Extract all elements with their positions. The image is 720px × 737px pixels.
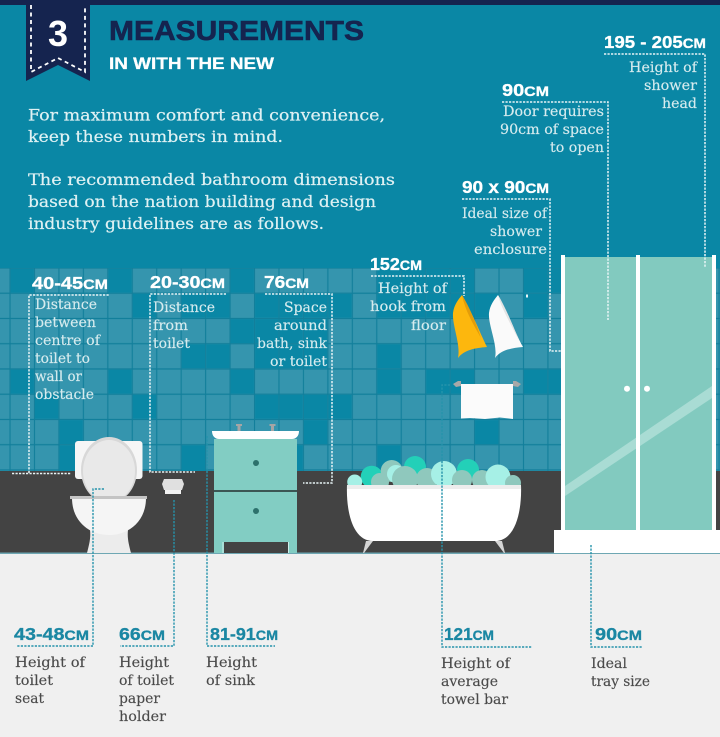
callout: 66cm: holder [119,709,166,725]
callout: 90cm tray: tray size [591,674,650,690]
intro text: based on the nation building and design [28,192,376,211]
callout: 90cm door: to open [550,140,604,156]
callout: 121cm [441,385,532,708]
callout: 40-45cm [12,273,109,474]
callout: 43-48cm: 43-48 CM [14,624,89,644]
callout: 195-205cm: Height of [629,60,698,76]
towel speck [526,294,528,298]
callout: 66cm [119,500,174,725]
intro text: For maximum comfort and convenience, [28,106,385,124]
callout: 121cm: towel bar [441,692,508,708]
intro text: industry guidelines are as follows. [28,214,324,233]
callout: 90 x 90cm [462,177,562,351]
callout: 43-48cm [14,489,104,707]
callout: 76cm [257,272,332,483]
callout: 66cm: of toilet [119,673,174,689]
bath bubbles [347,456,521,485]
intro text [28,106,395,233]
intro text: The recommended bathroom dimensions [28,170,395,189]
ribbon badge: 3 [48,13,68,54]
callout: 195-205cm [604,32,706,267]
callout: 81-91cm: 81-91CM [210,624,278,644]
callout: 40-45cm: centre of [35,333,101,349]
top bar [0,0,720,5]
callout: 152cm: Height of [378,281,448,297]
callout: 76cm: 76CM [264,272,309,292]
callout: 121cm: 121CM [444,624,494,644]
callout: 121cm: Height of [441,656,512,672]
callout: 90cm door: 90cm of space [500,122,604,138]
callout: 81-91cm: Height [206,655,257,671]
callout: 195-205cm: head [662,96,697,112]
callout: 90cm door: Door requires [503,104,604,120]
callout: 195-205cm: shower [644,78,698,94]
callout: 90 x 90cm: enclosure [474,242,547,258]
callout: 152cm: floor [411,318,447,334]
callout: 20-30cm: 20-30 CM [150,272,225,292]
callout: 66cm: 66CM [119,624,165,644]
callout: 90cm tray [591,545,650,690]
callout: 90 x 90cm: Ideal size of [462,206,548,222]
callout: 90cm tray: 90CM [595,624,642,644]
toilet paper holder [162,479,184,494]
callout: 40-45cm: 40-45 CM [32,273,108,293]
sink cabinet [212,424,299,553]
towel bar [453,381,521,419]
callout: 40-45cm: toilet to [35,351,90,367]
bathtub [347,485,521,553]
callout: 76cm: bath, sink [257,336,328,352]
tiled wall [0,268,720,472]
lower area [0,554,720,737]
callout: 152cm [370,254,464,334]
callout: 195-205cm: 195 - 205 CM [604,32,706,52]
callout: 43-48cm: seat [15,691,44,707]
callout: 90cm tray: Ideal [591,656,628,672]
callout: 81-91cm: of sink [206,673,256,689]
callout: 20-30cm: toilet [153,336,191,352]
callout: 76cm: or toilet [270,354,328,370]
ribbon badge [26,5,90,81]
callout: 40-45cm: between [35,315,96,331]
callout: 90 x 90cm: 90 x 90 CM [462,177,549,197]
title: MEASUREMENTS [109,15,364,46]
callout: 152cm: hook from [370,299,446,315]
callout: 40-45cm: obstacle [35,387,94,403]
callout: 76cm: around [274,318,327,334]
callout: 40-45cm: wall or [35,369,83,385]
floor [0,471,720,553]
white towel [489,295,523,358]
callout: 43-48cm: toilet [15,673,53,689]
orange towel [453,295,487,358]
intro text: keep these numbers in mind. [28,127,283,146]
callout: 76cm: Space [284,300,327,316]
callout: 66cm: Height [119,655,169,671]
callout: 66cm: paper [119,691,160,707]
callout: 81-91cm [206,436,278,689]
callout: 90 x 90cm: shower [490,224,543,240]
callout: 20-30cm: from [153,318,188,334]
callout: 90cm door [500,80,608,320]
shower enclosure [554,255,720,553]
subtitle: IN WITH THE NEW [109,54,275,73]
callout: 20-30cm [150,272,226,472]
callout: 152cm: 152CM [370,254,422,274]
callout: 20-30cm: Distance [153,300,215,316]
callout: 90cm door: 90CM [502,80,549,100]
callout: 43-48cm: Height of [15,655,87,671]
callout: 121cm: average [441,674,498,690]
callout: 40-45cm: Distance [35,297,97,313]
toilet [70,437,147,553]
